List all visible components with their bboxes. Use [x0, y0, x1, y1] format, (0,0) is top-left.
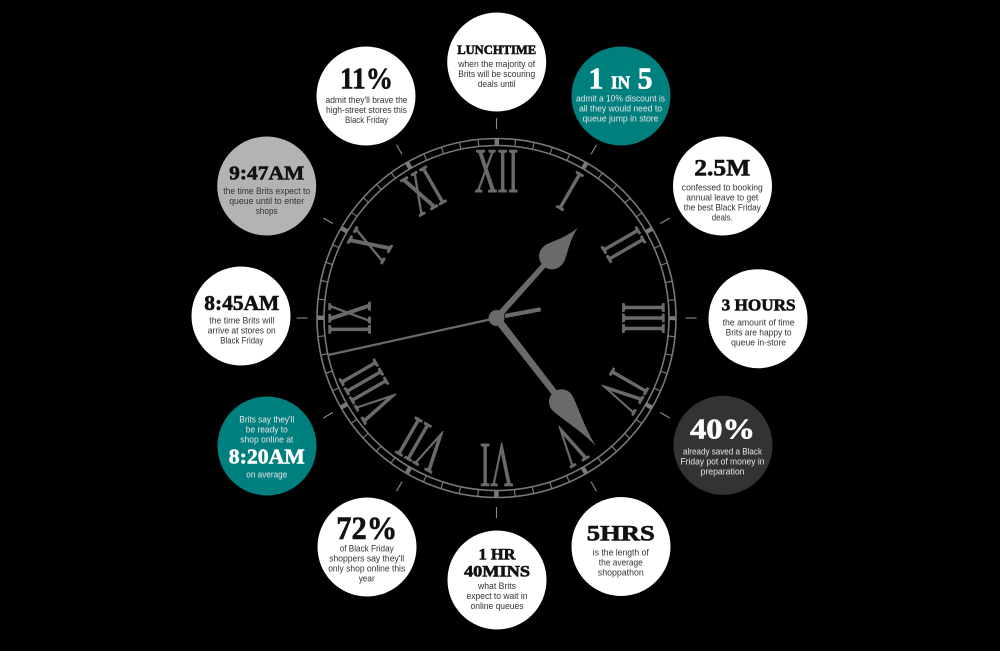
stat: 40%: Friday pot of money in: [680, 455, 764, 466]
stat: 72%: year: [359, 572, 375, 583]
stat: 9:47am: the time Brits expect to: [223, 185, 310, 196]
roman numerals: IV: [585, 360, 662, 423]
stat: 11%: admit they'll brave the: [326, 94, 408, 105]
stat: 2.5M: confessed to booking: [682, 182, 763, 193]
stat: 8:45am: arrive at stores on: [208, 324, 276, 335]
stat: 8:20am: be ready to: [246, 424, 288, 435]
stat: 9:47am: [217, 136, 316, 236]
stat: 3 hours: queue in-store: [731, 336, 786, 347]
stat: 1 in 5: queue jump in store: [582, 112, 658, 124]
stat: 5hrs: 5HRS: [587, 521, 655, 546]
stat: 2.5M: annual leave to get: [686, 192, 759, 203]
stat: 11%: Black Friday: [345, 114, 388, 125]
stat: 8:45am: 8:45AM: [204, 291, 279, 315]
clock face: [315, 136, 678, 500]
roman numerals: [315, 136, 678, 500]
stat: 1 hr 40 mins: 40MINS: [464, 564, 530, 581]
stat: 9:47am: 9:47AM: [229, 162, 304, 184]
stat: 1 in 5: [572, 46, 670, 146]
hour ticks linking stats to clock: [296, 118, 696, 518]
stat: 8:45am: the time Brits will: [209, 314, 274, 325]
roman numerals: VII: [387, 404, 459, 486]
roman numerals: VIII: [326, 351, 413, 432]
stat: 8:20am: 8:20AM: [229, 444, 305, 468]
stat: lunchtime: LUNCHTIME: [457, 42, 536, 57]
stat: 1 hr 40 mins: [448, 530, 546, 630]
roman numerals: IX: [315, 301, 384, 335]
stat: 40%: already saved a Black: [683, 445, 762, 456]
stat: 72%: [318, 498, 416, 596]
stat: 1 hr 40 mins: expect to wait in: [466, 590, 528, 601]
roman numerals: V: [543, 409, 597, 481]
stat: 1 hr 40 mins: what Brits: [477, 580, 516, 591]
stat: 5hrs: the average: [599, 556, 643, 568]
stat: lunchtime: [447, 12, 546, 112]
stat: 40%: preparation: [700, 465, 744, 476]
stat: 72%: only shop online this: [328, 562, 405, 573]
stat: lunchtime: Brits will be scouring: [458, 68, 535, 79]
stat: 5hrs: [572, 497, 670, 596]
stat: 72%: shoppers say they'll: [329, 552, 404, 563]
stat: 3 hours: [708, 269, 808, 368]
roman numerals: X: [333, 217, 405, 272]
roman numerals: III: [609, 302, 678, 334]
stat: 72%: 72%: [336, 511, 397, 547]
roman numerals: XI: [391, 152, 455, 229]
stat: 9:47am: queue until to enter: [229, 195, 304, 206]
stat: 1 in 5: admit a 10% discount is: [576, 92, 665, 104]
clock ring with minute track: [317, 138, 676, 498]
clock hub: [488, 310, 504, 326]
stat: 2.5M: the best Black Friday: [684, 202, 761, 213]
stat: 3 hours: Brits are happy to: [726, 326, 792, 337]
stat: lunchtime: deals until: [478, 78, 516, 89]
stat: 8:20am: [218, 396, 316, 496]
stat: 72%: of Black Friday: [340, 542, 394, 553]
stat: 2.5M: deals.: [712, 212, 733, 223]
stat: 11%: high-street stores this: [326, 104, 407, 115]
stat: 5hrs: is the length of: [593, 546, 649, 558]
stat: 1 in 5: all they would need to: [579, 102, 662, 114]
second hand: [328, 309, 541, 355]
stat: lunchtime: when the majority of: [457, 58, 536, 69]
minute hand: [487, 310, 606, 454]
stat: 8:45am: [192, 266, 290, 366]
stat: 9:47am: shops: [256, 205, 278, 216]
stat: 8:20am: Brits say they'll: [239, 414, 294, 425]
stat: 1 hr 40 mins: online queues: [470, 600, 524, 611]
stat: 1 in 5: 1 IN 5: [588, 60, 652, 95]
hour hand: [487, 219, 587, 327]
stat: 8:20am: on average: [246, 468, 287, 479]
stat: 8:45am: Black Friday: [220, 334, 264, 345]
stat: 2.5M: [673, 136, 772, 236]
roman numerals: XII: [475, 136, 518, 206]
stat: 11%: 11%: [340, 61, 393, 96]
stat: 5hrs: shoppathon: [598, 566, 644, 578]
stat: 8:20am: shop online at: [240, 434, 294, 445]
stat: 3 hours: the amount of time: [723, 316, 795, 327]
stat: 40%: [674, 396, 772, 495]
stat: 11%: [316, 46, 416, 146]
stat: 3 hours: 3 HOURS: [722, 295, 796, 314]
stat: 40%: 40%: [690, 414, 755, 445]
roman numerals: I: [548, 158, 592, 224]
roman numerals: VI: [480, 430, 513, 500]
stat: 1 hr 40 mins: 1 HR: [478, 546, 516, 563]
stat: 2.5M: 2.5M: [694, 156, 751, 181]
roman numerals: II: [588, 218, 659, 271]
